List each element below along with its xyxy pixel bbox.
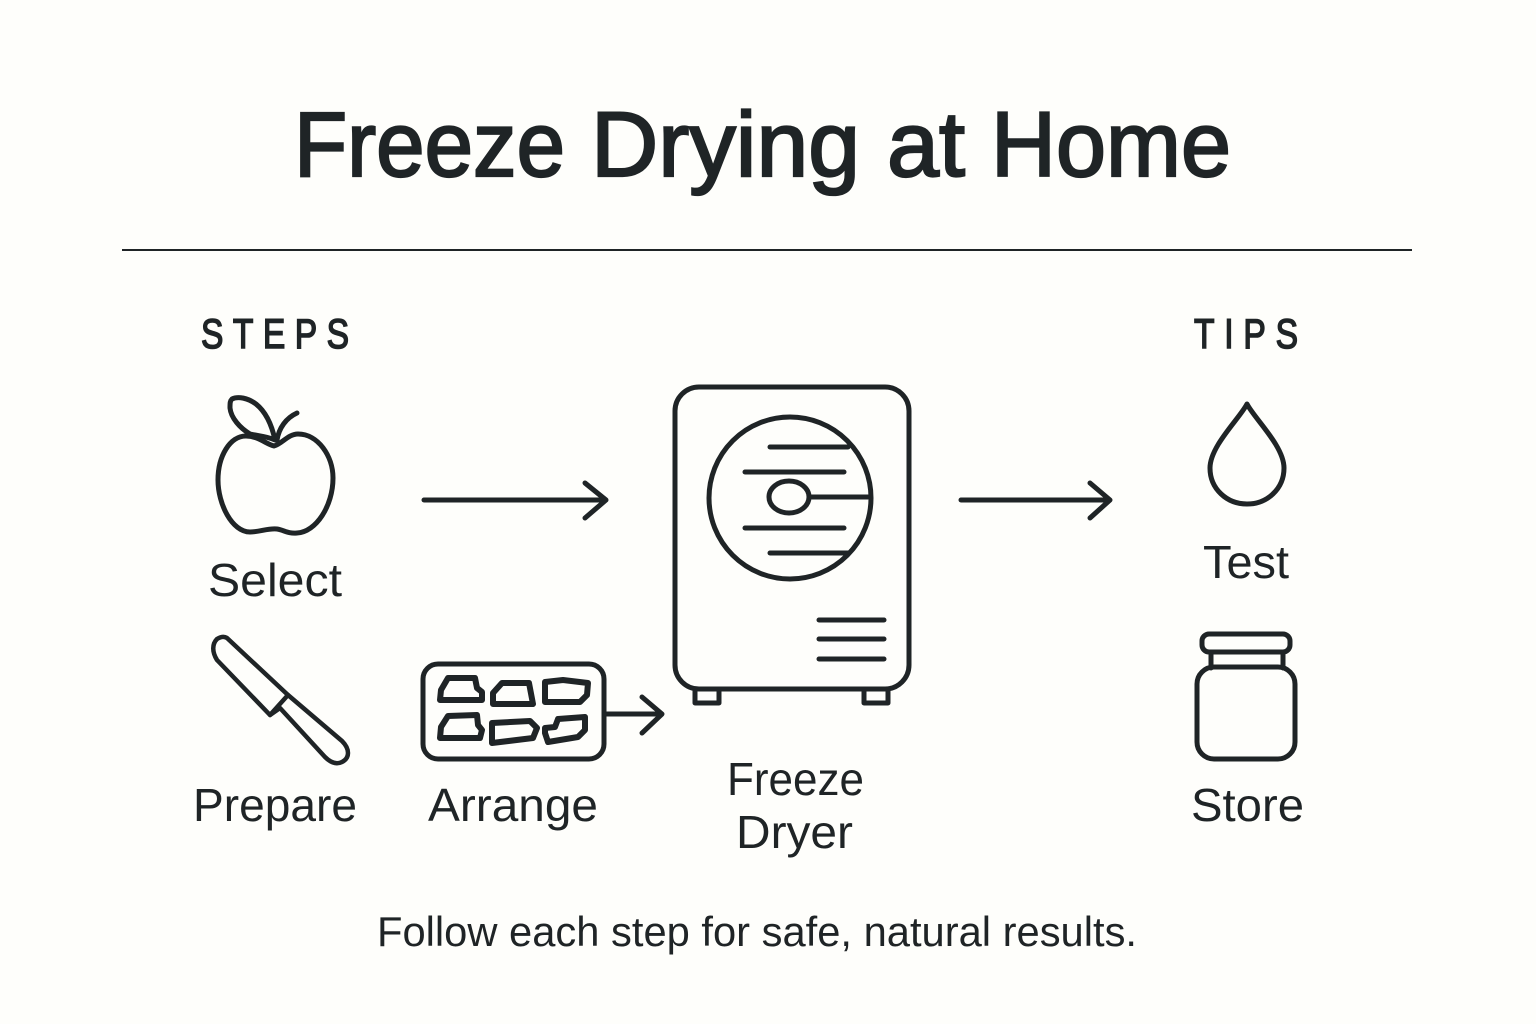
title: at: [887, 94, 965, 196]
arrow: tray to freeze dryer: [605, 697, 662, 733]
footer caption: Follow each step for safe, natural results.: [377, 908, 1137, 955]
title: [294, 94, 1231, 196]
title: Freeze: [294, 94, 565, 196]
step: arrange: [423, 664, 604, 831]
label: freeze dryer: [727, 753, 864, 858]
heading: steps: STEPS: [201, 312, 349, 358]
label: freeze dryer: Dryer: [736, 806, 853, 858]
title: Drying: [591, 94, 860, 196]
heading: tips: TIPS: [1194, 312, 1298, 358]
icon: freeze dryer machine: [675, 387, 909, 703]
title: Home: [991, 94, 1231, 196]
label: prepare: Prepare: [193, 779, 357, 831]
icon: jar: [1197, 634, 1295, 759]
freeze dryer: [675, 387, 909, 858]
icon: apple: [218, 398, 333, 533]
label: test: Test: [1203, 536, 1289, 588]
label: arrange: Arrange: [428, 779, 598, 831]
step: prepare: [193, 637, 357, 831]
tip: test: [1203, 404, 1289, 588]
label: select: Select: [208, 554, 342, 606]
tip: store: [1191, 634, 1304, 831]
icon: knife: [213, 637, 348, 763]
arrow: select to freeze dryer: [424, 483, 606, 518]
label: freeze dryer: Freeze: [727, 753, 864, 805]
icon: water drop: [1210, 404, 1284, 504]
label: store: Store: [1191, 779, 1304, 831]
step: select: [208, 398, 342, 606]
icon: tray with food pieces: [423, 664, 604, 759]
arrow: freeze dryer to tips: [961, 483, 1110, 518]
